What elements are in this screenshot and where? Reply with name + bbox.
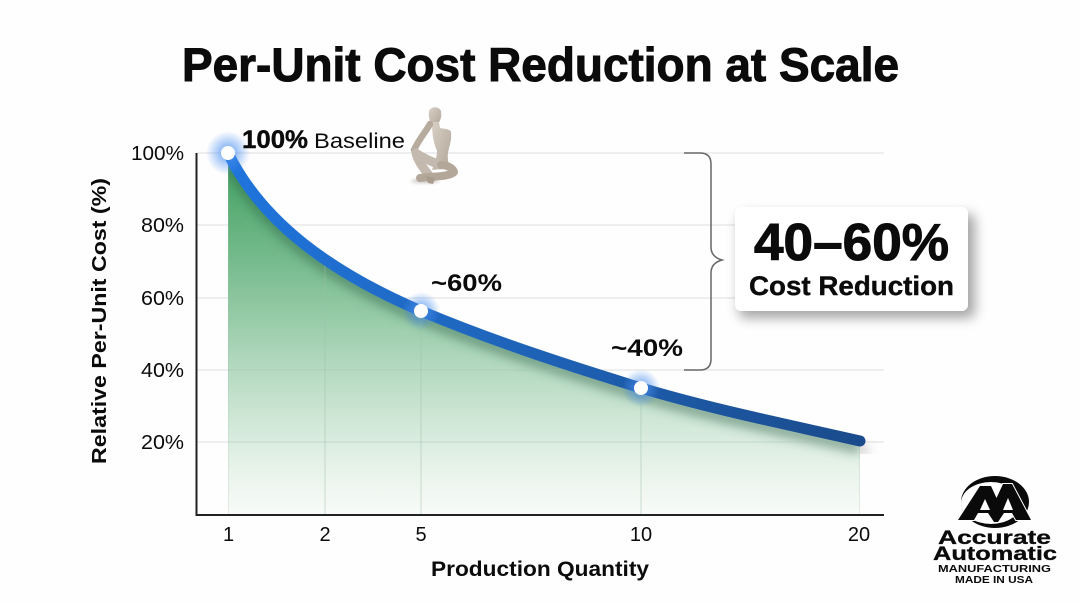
- y-axis labels: 60%: [141, 288, 184, 310]
- right leg: [420, 165, 454, 178]
- x-axis labels: [223, 524, 870, 546]
- logo mark: [958, 476, 1031, 528]
- y-axis labels: 40%: [141, 360, 184, 382]
- head: [429, 107, 441, 125]
- label: ~60%: ~60%: [431, 270, 502, 297]
- callout: cost reduction: Cost Reduction: [749, 271, 954, 301]
- y-axis labels: 20%: [141, 432, 184, 454]
- grid lines: [197, 153, 884, 442]
- x-axis labels: 20: [848, 524, 870, 546]
- infographic canvas: [91, 46, 1056, 583]
- y-axis labels: 100%: [131, 143, 184, 165]
- y-axis labels: 80%: [141, 215, 184, 237]
- figure shadow: [411, 179, 439, 183]
- title: Per-Unit Cost Reduction at Scale: [182, 38, 899, 91]
- foot: [426, 176, 435, 184]
- callout: cost reduction: 40–60%: [754, 214, 949, 272]
- right counter: [1003, 498, 1013, 510]
- x-axis labels: 5: [415, 524, 427, 546]
- x-axis title: Production Quantity: [431, 558, 649, 581]
- cost curve: [228, 153, 860, 441]
- chart: [89, 126, 884, 581]
- logo: Accurate Automatic: MANUFACTURING: [938, 563, 1051, 575]
- ring interior: [961, 482, 1021, 524]
- ring: [961, 476, 1029, 528]
- data point: 60%: [402, 292, 440, 330]
- x-axis labels: 2: [319, 524, 331, 546]
- neck and torso: [432, 122, 451, 170]
- logo name: Accurate: [938, 528, 1051, 549]
- x-axis labels: 1: [223, 524, 234, 546]
- label: 100% baseline: 100%: [242, 126, 308, 154]
- logo: Accurate Automatic: [933, 476, 1058, 586]
- green area under curve: [228, 165, 860, 514]
- axes: [196, 153, 884, 515]
- label: 100% baseline: Baseline: [314, 130, 405, 153]
- logo: Accurate Automatic: Automatic: [933, 544, 1058, 565]
- label: ~40%: ~40%: [611, 335, 683, 362]
- double-A letter M: [958, 484, 1031, 522]
- callout: cost reduction: [735, 207, 975, 318]
- logo: Accurate Automatic: MADE IN USA: [955, 574, 1033, 586]
- data point: 100%: [206, 131, 250, 175]
- icon: seated thinking figure: [411, 107, 454, 184]
- curve shadow past the end of the area: [800, 436, 868, 451]
- bracket: [684, 153, 722, 370]
- left counter: [980, 499, 990, 510]
- left leg: [416, 153, 440, 178]
- data point: 40%: [622, 369, 660, 407]
- y-axis labels: [131, 143, 184, 454]
- arm on cheek: [414, 124, 430, 150]
- label: 100% baseline: [242, 126, 405, 154]
- x-axis labels: 10: [630, 524, 652, 546]
- y-axis title: Relative Per-Unit Cost (%): [89, 178, 111, 464]
